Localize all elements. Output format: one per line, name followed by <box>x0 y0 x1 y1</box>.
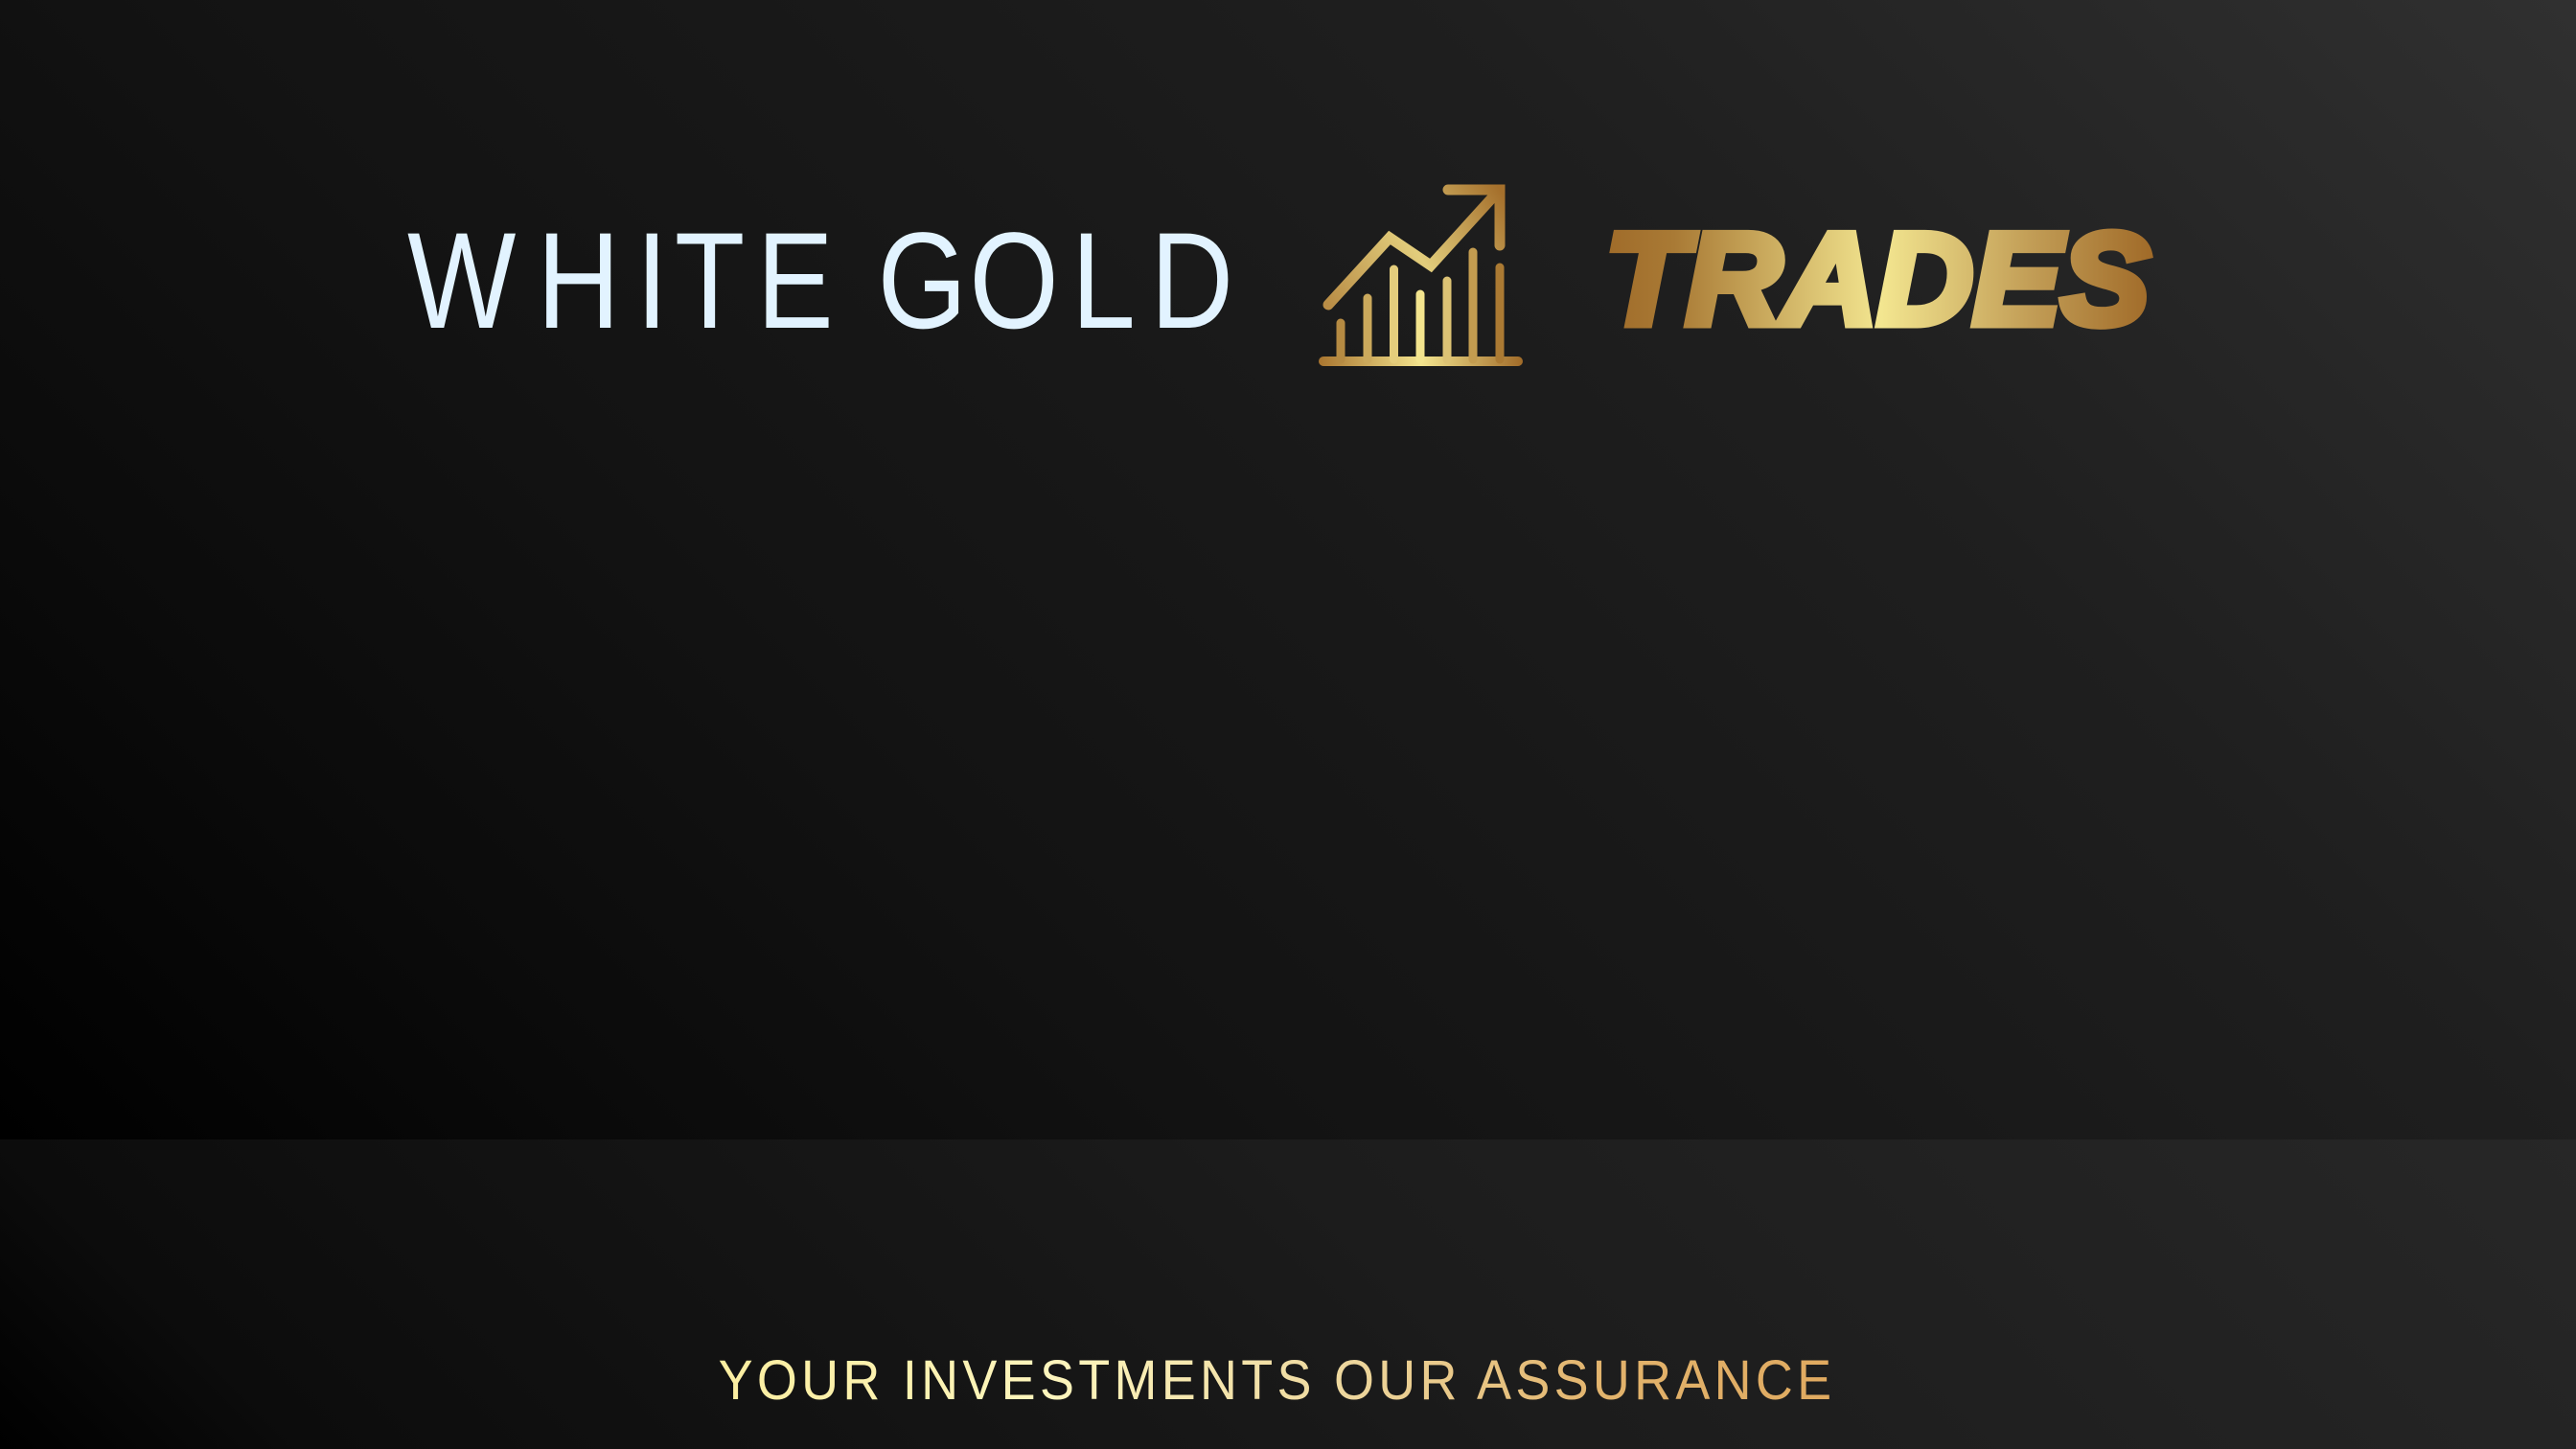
tagline: YOUR INVESTMENTS OUR ASSURANCE <box>719 1348 1831 1411</box>
trend line arrow <box>1328 190 1500 305</box>
chart bars <box>1341 252 1500 359</box>
background: lower band <box>0 1139 2576 1449</box>
title: WHITE GOLD: WHITE GOLD <box>407 203 1233 356</box>
title: TRADES: TRADES <box>1605 206 2150 352</box>
chart base line <box>1319 356 1523 366</box>
background: upper panel <box>0 0 2576 1139</box>
icon: rising bar chart with arrow <box>1319 190 1523 366</box>
